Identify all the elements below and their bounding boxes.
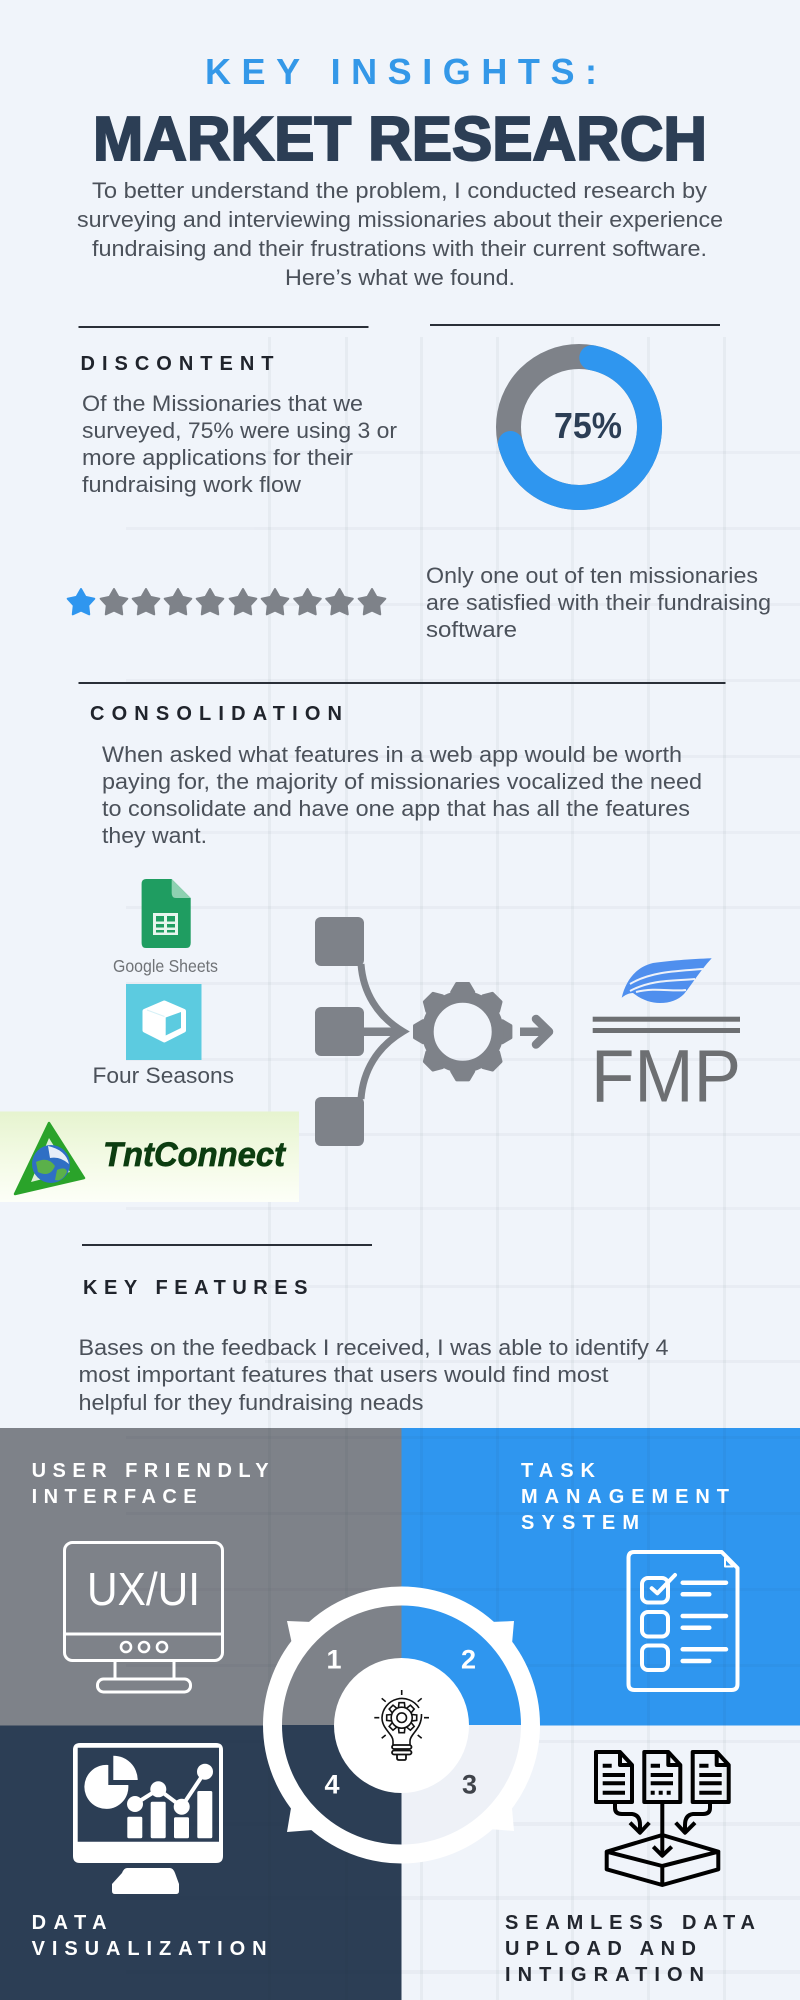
consolidation paragraph: When asked what features in a web app would be worth bbox=[102, 742, 682, 767]
icon: checklist document bbox=[628, 1552, 738, 1690]
number 1: 1 bbox=[326, 1644, 342, 1674]
star rating: one of ten bbox=[68, 589, 385, 614]
logo: tntconnect bbox=[0, 1112, 299, 1202]
icon: light bulb with gear bbox=[374, 1690, 429, 1760]
key features paragraph bbox=[78, 1335, 668, 1415]
satisfaction paragraph: software bbox=[426, 617, 517, 642]
heading: discontent: DISCONTENT bbox=[80, 353, 274, 375]
label: user friendly interface: USER FRIENDLY bbox=[32, 1460, 269, 1482]
discontent paragraph: more applications for their bbox=[82, 445, 353, 470]
label: task management system: SYSTEM bbox=[521, 1512, 639, 1534]
title: key insights: KEY INSIGHTS: bbox=[205, 51, 597, 92]
icon: ux/ui monitor: UX/UI bbox=[87, 1563, 200, 1615]
donut chart: 75% bbox=[508, 356, 650, 498]
satisfaction paragraph bbox=[426, 563, 771, 642]
quadrant: task management system bbox=[402, 1428, 800, 1726]
key features paragraph: Bases on the feedback I received, I was able to identify 4 bbox=[78, 1335, 668, 1360]
label: seamless data upload and integration: INTIGRATION bbox=[505, 1964, 704, 1986]
icon: ux/ui monitor bbox=[64, 1542, 222, 1692]
label: user friendly interface bbox=[32, 1460, 269, 1508]
logo: fmp: FMP bbox=[591, 1034, 741, 1118]
consolidation paragraph: to consolidate and have one app that has all the features bbox=[102, 796, 690, 821]
label: data visualization: VISUALIZATION bbox=[32, 1938, 267, 1960]
satisfaction paragraph: Only one out of ten missionaries bbox=[426, 563, 758, 588]
number 2: 2 bbox=[461, 1644, 476, 1674]
label: seamless data upload and integration: UPLOAD AND bbox=[505, 1938, 696, 1960]
key features paragraph: helpful for they fundraising neads bbox=[78, 1390, 424, 1415]
diagram: inputs merging bbox=[315, 917, 405, 1146]
intro paragraph: Here’s what we found. bbox=[285, 265, 515, 290]
label: task management system: TASK bbox=[521, 1460, 596, 1482]
label: task management system bbox=[521, 1460, 729, 1534]
label: data visualization: DATA bbox=[32, 1912, 107, 1934]
logo: tntconnect: TntConnect bbox=[103, 1136, 287, 1174]
icon: gear bbox=[415, 984, 511, 1080]
consolidation paragraph bbox=[102, 742, 702, 848]
label: data visualization bbox=[32, 1912, 267, 1960]
key features paragraph: most important features that users would find most bbox=[78, 1362, 608, 1387]
icon: document upload bbox=[596, 1752, 729, 1885]
intro paragraph: To better understand the problem, I conducted research by bbox=[92, 178, 707, 203]
discontent paragraph: fundraising work flow bbox=[82, 472, 301, 497]
quadrant: user friendly interface bbox=[0, 1428, 402, 1726]
quadrant: data visualization bbox=[0, 1726, 402, 2000]
consolidation paragraph: paying for, the majority of missionaries vocalized the need bbox=[102, 769, 702, 794]
intro paragraph: fundraising and their frustrations with their current software. bbox=[92, 236, 707, 261]
label: task management system: MANAGEMENT bbox=[521, 1486, 729, 1508]
arrow bbox=[520, 1019, 549, 1044]
number 4: 4 bbox=[324, 1770, 340, 1800]
central ring bbox=[272, 1596, 530, 1854]
label: seamless data upload and integration bbox=[505, 1912, 755, 1986]
discontent paragraph bbox=[82, 391, 397, 497]
consolidation paragraph: they want. bbox=[102, 823, 207, 848]
label: seamless data upload and integration: SEAMLESS DATA bbox=[505, 1912, 755, 1934]
heading: consolidation: CONSOLIDATION bbox=[90, 703, 342, 725]
label: user friendly interface: INTERFACE bbox=[32, 1486, 197, 1508]
logo: four seasons bbox=[92, 984, 234, 1088]
number 3: 3 bbox=[462, 1770, 477, 1800]
logo: four seasons: Four Seasons bbox=[92, 1063, 234, 1088]
logo: fmp bbox=[591, 958, 741, 1118]
intro paragraph: surveying and interviewing missionaries about their experience bbox=[77, 207, 723, 232]
intro paragraph bbox=[77, 178, 723, 290]
discontent paragraph: Of the Missionaries that we bbox=[82, 391, 363, 416]
logo: google sheets: Google Sheets bbox=[113, 956, 218, 976]
icon: data visualization monitor bbox=[73, 1743, 223, 1894]
satisfaction paragraph: are satisfied with their fundraising bbox=[426, 590, 771, 615]
heading: key features: KEY FEATURES bbox=[83, 1277, 308, 1299]
donut chart: 75%: 75% bbox=[554, 405, 622, 446]
logo: google sheets bbox=[113, 879, 218, 976]
title: market research: MARKET RESEARCH bbox=[93, 105, 707, 174]
discontent paragraph: surveyed, 75% were using 3 or bbox=[82, 418, 397, 443]
